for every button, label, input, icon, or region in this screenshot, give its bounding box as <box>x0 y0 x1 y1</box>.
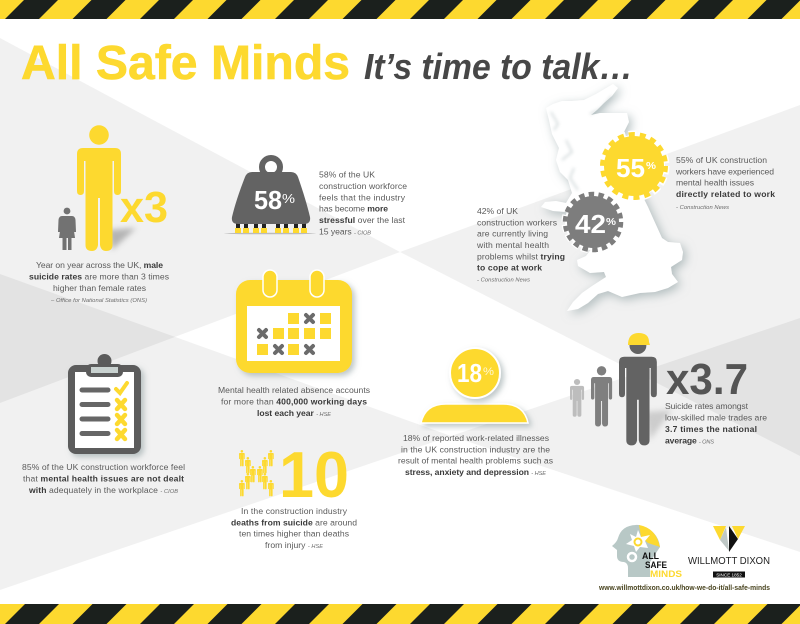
text: deaths from suicide: ten times higher than deaths <box>239 529 349 539</box>
text: 85% of workforce: 85% of the UK construction workforce feel <box>22 462 185 472</box>
top hazard stripe <box>0 0 800 19</box>
gear: 55%: % <box>646 161 656 172</box>
stat: x10 deaths from suicide <box>231 438 357 550</box>
text: more stressful <box>319 170 407 236</box>
icon: clipboard <box>68 354 141 454</box>
icon: large worker with hard hat <box>619 333 657 445</box>
text: 42% of workers: with mental health <box>476 240 549 250</box>
title <box>21 37 633 90</box>
logo: Willmott Dixon <box>688 526 770 578</box>
bottom hazard stripe <box>0 604 800 624</box>
title: It’s time to talk… <box>364 46 633 87</box>
text: 42% of workers: are currently living <box>477 229 548 239</box>
website url: www.willmottdixon.co.uk/how-we-do-it/all-safe-minds <box>598 583 770 592</box>
logo: All Safe Minds: SAFE <box>645 560 667 570</box>
text: 18% of illnesses: in the UK construction industry are the <box>401 444 550 454</box>
text: male suicide rates <box>29 260 169 304</box>
icon: male figure <box>77 125 121 251</box>
text: 18% of illnesses: result of mental health problems such as <box>398 456 553 466</box>
text: more stressful: has become more <box>319 204 388 214</box>
text: deaths from suicide: deaths from suicide are around <box>231 517 357 527</box>
text: 42% of workers: - Construction News <box>477 278 530 284</box>
gear: 42%: 42 <box>575 209 606 239</box>
text: working days lost <box>218 385 370 418</box>
text: 18% of illnesses <box>398 433 553 477</box>
text: more stressful: stressful over the last <box>319 215 406 225</box>
icon: person bust with 18% head <box>421 348 528 423</box>
text: 18% of illnesses: 18% of reported work-related illnesses <box>403 433 549 443</box>
text: more stressful: feels that the industry <box>319 192 406 202</box>
stat: 85% clipboard <box>22 354 185 495</box>
text: deaths from suicide: from injury - HSE <box>265 540 323 550</box>
text: 85% of workforce: with adequately in the workplace - CIOB <box>28 485 178 495</box>
text: 55% of workers: workers have experienced <box>675 166 774 176</box>
stat: 58% more stressful <box>224 158 407 236</box>
gear: 42%: % <box>606 217 616 228</box>
logo: All Safe Minds: MINDS <box>650 569 682 579</box>
text: low-skilled trades: average - ONS <box>665 435 714 445</box>
text: 55% of workers <box>675 155 775 211</box>
title: All Safe Minds <box>21 37 350 90</box>
map coastline detail <box>551 96 612 190</box>
text: more stressful: 58% of the UK <box>319 170 375 180</box>
icon: weight with workers' feet: % <box>282 191 295 206</box>
text: 55% of workers: mental health issues <box>676 178 754 188</box>
text: low-skilled trades <box>665 401 767 445</box>
text: working days lost: for more than 400,000 working days <box>221 396 367 406</box>
text: low-skilled trades: low-skilled male trades are <box>665 412 767 422</box>
text: more stressful: 15 years - CIOB <box>319 226 371 236</box>
icon: small figure <box>570 379 584 417</box>
icon: weight with workers' feet: 58 <box>254 185 282 215</box>
x3.7 figure: x3.7 <box>666 355 748 404</box>
text: deaths from suicide: In the construction industry <box>241 506 348 516</box>
stat: 18% of illnesses <box>398 348 553 477</box>
text: 42% of workers <box>476 206 565 284</box>
text: 18% of illnesses: stress, anxiety and depression - HSE <box>405 467 546 477</box>
gear: 55%: 55 <box>616 153 645 183</box>
icon: figure shadow <box>108 228 136 250</box>
text: 42% of workers: to cope at work <box>477 263 542 273</box>
text: low-skilled trades: Suicide rates amongst <box>665 401 749 411</box>
logo: Willmott Dixon: SINCE 1852 <box>716 572 742 578</box>
icon: weight with workers' feet <box>224 158 316 234</box>
icon: female figure <box>58 208 76 250</box>
logo: All Safe Minds: ALL <box>642 551 659 561</box>
text: male suicide rates: Year on year across the UK, male <box>36 260 163 270</box>
text: more stressful: construction workforce <box>319 181 407 191</box>
text: male suicide rates: suicide rates are more than 3 times <box>29 272 169 282</box>
stat: male suicide rates x3 <box>29 125 169 304</box>
icon: people forming an x <box>239 450 274 496</box>
UK map <box>541 84 683 311</box>
text: low-skilled trades: 3.7 times the national <box>665 424 757 434</box>
icon: person bust with 18% head: 18 <box>457 358 482 388</box>
text: 55% of workers: - Construction News <box>676 205 729 211</box>
text: male suicide rates: higher than female rates <box>53 283 146 293</box>
text: 42% of workers: 42% of UK <box>477 206 518 216</box>
text: deaths from suicide <box>231 506 357 550</box>
x10 figure: 10 <box>279 438 349 511</box>
icon: medium figure <box>591 366 612 426</box>
x3 figure: x3 <box>120 183 168 232</box>
text: 42% of workers: problems whilst trying <box>477 251 565 261</box>
stat: working days lost <box>218 270 370 418</box>
text: working days lost: lost each year - HSE <box>257 408 331 418</box>
text: 55% of workers: 55% of UK construction <box>676 155 767 165</box>
gear: 42% <box>564 194 622 250</box>
icon: calendar <box>236 270 352 373</box>
icon: person bust with 18% head: % <box>483 366 494 378</box>
text: male suicide rates: – Office for National Statistics (ONS) <box>50 298 147 304</box>
logo: Willmott Dixon: WILLMOTT DIXON <box>688 555 770 567</box>
text: 55% of workers: directly related to work <box>676 189 775 199</box>
icon: figure shadows <box>645 410 672 440</box>
gear: 55% <box>602 134 666 198</box>
text: 85% of workforce <box>22 462 185 495</box>
stat: x3.7 low-skilled trades <box>570 333 767 445</box>
text: 85% of workforce: that mental health issues are not dealt <box>23 474 184 484</box>
logo: All Safe Minds <box>612 525 682 579</box>
text: working days lost: Mental health related absence accounts <box>218 385 370 395</box>
text: 42% of workers: construction workers <box>477 217 557 227</box>
